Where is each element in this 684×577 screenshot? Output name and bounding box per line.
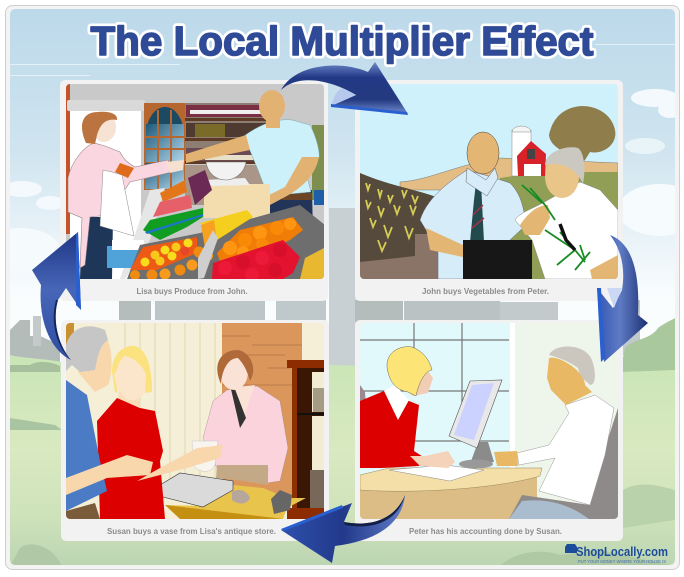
card machine	[271, 490, 292, 514]
counter	[120, 188, 165, 279]
counter	[165, 485, 306, 519]
figure: woman in pink	[203, 350, 288, 485]
side shelf	[312, 125, 324, 200]
illustration: antique store	[66, 323, 324, 519]
illustration: market stall	[66, 84, 325, 282]
figure: Peter	[494, 347, 614, 519]
illustration: farm	[360, 84, 618, 279]
title: The Local Multiplier Effect	[90, 18, 594, 64]
panel: John buys vegetables from Peter	[355, 80, 623, 301]
figure: woman in red	[97, 346, 223, 519]
illustration: accountant office	[360, 323, 618, 519]
arrow: bottom, from Peter panel to Susan panel	[281, 495, 405, 563]
logo: ShopLocally.com	[565, 544, 668, 564]
caption: Lisa buys Produce from John.	[136, 287, 248, 296]
title: The Local Multiplier Effect	[90, 18, 594, 64]
caption: Peter has his accounting done by Susan.	[409, 527, 562, 536]
figure: man in blue	[66, 326, 153, 519]
panel: Susan buys a vase from Lisa's antique store	[61, 320, 329, 541]
laptop	[463, 240, 532, 279]
figure: Peter	[515, 147, 618, 279]
panel: Peter has his accounting done by Susan	[355, 320, 623, 541]
figure: John	[186, 90, 320, 216]
arrow: right, from John panel to Peter panel	[597, 235, 648, 362]
monitor	[449, 380, 502, 468]
figure: Susan	[360, 347, 455, 468]
caption: John buys Vegetables from Peter.	[422, 287, 549, 296]
logo: ShopLocally.com: ShopLocally.com	[576, 545, 668, 559]
plants	[522, 185, 590, 270]
chair	[509, 408, 618, 519]
scale	[204, 162, 270, 218]
produce	[107, 170, 325, 282]
arrow: top, from Lisa panel to John panel	[281, 62, 408, 115]
vase	[192, 441, 218, 471]
cabinet	[287, 360, 324, 519]
icon: storefront	[565, 544, 577, 553]
arrow: left, from Susan panel to Lisa panel	[32, 232, 81, 360]
desk	[360, 477, 537, 519]
box	[160, 473, 233, 507]
figure: John	[420, 132, 526, 279]
caption: Susan buys a vase from Lisa's antique store.	[107, 527, 276, 536]
logo: ShopLocally.com: PUT YOUR MONEY WHERE YOUR HOUSE IS	[578, 559, 666, 564]
panel: Lisa buys produce from John	[60, 80, 328, 301]
figure: Lisa	[68, 112, 184, 279]
